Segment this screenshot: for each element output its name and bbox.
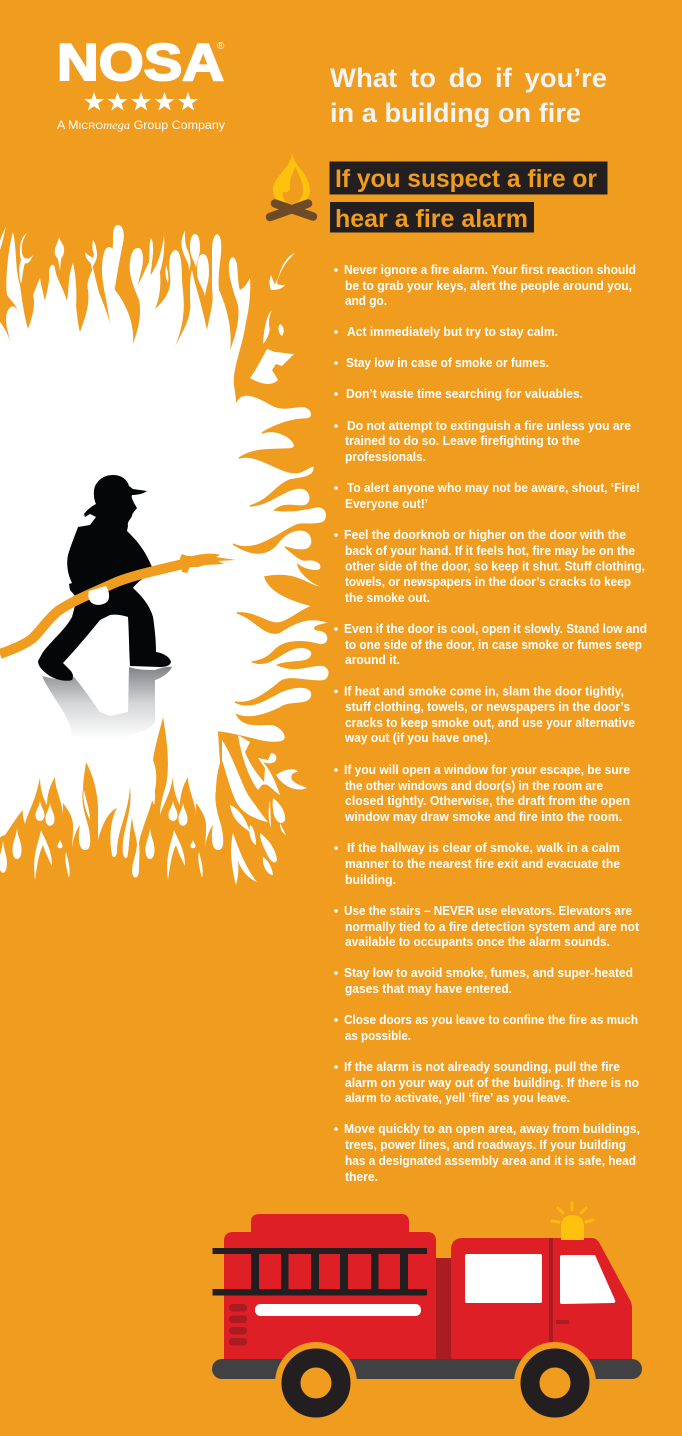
bullet 9 (334, 684, 635, 745)
bullet 5: professionals. (345, 449, 426, 464)
white slivers in lower right flames (222, 735, 307, 885)
bullet 10: window may draw smoke and fire into the room. (344, 809, 622, 824)
bullet 1: and go. (345, 293, 387, 308)
bullet 6: To alert anyone who may not be aware, shout, ‘Fire! (347, 480, 640, 495)
bullet 16: there. (345, 1169, 378, 1184)
bullet 12: available to occupants once the alarm sounds. (345, 934, 610, 949)
bullet 16: trees, power lines, and roadways. If your building (345, 1137, 626, 1152)
title: in a building on fire (330, 98, 581, 128)
truck rear body (224, 1214, 436, 1359)
bullet 1: Never ignore a fire alarm. Your first reaction should (344, 262, 636, 277)
logo: NOSA: NOSA (57, 34, 224, 92)
bullet 10: closed tightly. Otherwise, the draft from the open (345, 793, 630, 808)
truck cab (451, 1238, 632, 1359)
bullet 16: Move quickly to an open area, away from buildings, (344, 1121, 640, 1136)
bullet 15: alarm on your way out of the building. If there is no (345, 1075, 639, 1090)
white drops in top flames (0, 225, 295, 384)
glove (88, 586, 109, 605)
bullet 12: Use the stairs – NEVER use elevators. Elevators are (344, 903, 632, 918)
title (330, 63, 607, 128)
bullet 12 (334, 903, 640, 949)
cab windows (465, 1254, 615, 1304)
top flames (0, 232, 250, 712)
logo: NOSA (57, 34, 225, 132)
bullet 14: as possible. (345, 1028, 411, 1043)
bullet 6 (334, 480, 640, 511)
bullet 13 (334, 965, 633, 996)
bullet 4: Don’t waste time searching for valuables. (346, 386, 583, 401)
bullet 11: If the hallway is clear of smoke, walk in a calm (347, 840, 620, 855)
bullet 2: Act immediately but try to stay calm. (347, 324, 558, 339)
bullet 8: to one side of the door, in case smoke or fumes seep (345, 637, 642, 652)
bullet 15: If the alarm is not already sounding, pull the fire (344, 1059, 620, 1074)
bullet 1: be to grab your keys, alert the people around you, (345, 278, 632, 293)
bullet 16: has a designated assembly area and it is safe, head (345, 1153, 636, 1168)
chassis (212, 1359, 642, 1379)
heading: if you suspect a fire or hear a fire alarm: hear a fire alarm (335, 205, 528, 233)
bullet 3: Stay low in case of smoke or fumes. (346, 355, 549, 370)
bullet 10 (334, 762, 630, 824)
heading: if you suspect a fire or hear a fire alarm (330, 162, 608, 233)
bullet 7: the smoke out. (345, 590, 430, 605)
illustration: fire truck (212, 1203, 642, 1424)
bullet 7: other side of the door, so keep it shut. Stuff clothing, (345, 558, 645, 574)
right flames (200, 395, 330, 743)
bullet 8: Even if the door is cool, open it slowly. Stand low and (344, 621, 647, 636)
bullet 9: way out (if you have one). (344, 730, 491, 745)
reflection (42, 667, 172, 739)
bullet 11: building. (345, 872, 396, 887)
nozzle and spray (180, 554, 236, 573)
bullet 7: towels, or newspapers in the door’s cracks to keep (345, 574, 631, 589)
bullet list (334, 262, 647, 1184)
bullet 9: stuff clothing, towels, or newspapers in the door’s (345, 699, 630, 714)
bullet 15 (334, 1059, 639, 1105)
logo: NOSA: ® (217, 41, 225, 52)
bullet 10: the other windows and door(s) in the room are (345, 778, 603, 793)
bullet 11 (334, 840, 620, 887)
vents (229, 1304, 247, 1346)
heading: if you suspect a fire or hear a fire alarm: If you suspect a fire or (335, 165, 597, 193)
bullet 16 (334, 1121, 640, 1184)
bullet 6: Everyone out!’ (345, 496, 428, 511)
bullet 7: back of your hand. If it feels hot, fire may be on the (345, 543, 635, 558)
bullet 8 (334, 621, 647, 667)
bullet 5 (334, 418, 631, 464)
bullet 7 (334, 527, 645, 605)
bullet 9: If heat and smoke come in, slam the door tightly, (344, 684, 624, 698)
bullet 7: Feel the doorknob or higher on the door with the (344, 527, 626, 542)
bullet 8: around it. (345, 652, 400, 667)
bullet 15: alarm to activate, yell ‘fire’ as you leave. (345, 1090, 570, 1105)
hose (0, 564, 183, 654)
white drops in bottom flames (0, 780, 203, 880)
bullet 13: gases that may have entered. (345, 981, 512, 996)
white stripe (255, 1304, 421, 1316)
bullet 12: normally tied to a fire detection system and are not (345, 919, 640, 934)
bullet 5: trained to do so. Leave firefighting to the (345, 433, 580, 448)
bottom flames (0, 708, 223, 878)
wheels (275, 1342, 596, 1424)
ladder (212, 1248, 427, 1296)
bullet 14: Close doors as you leave to confine the fire as much (344, 1012, 638, 1027)
title: What to do if you’re (330, 63, 607, 93)
bullet 9: cracks to keep smoke out, and use your alternative (345, 715, 635, 730)
icon: campfire (270, 153, 313, 217)
bullet 14 (334, 1012, 638, 1043)
siren light (552, 1203, 593, 1240)
illustration: white fire burst (0, 225, 330, 885)
bullet 13: Stay low to avoid smoke, fumes, and super-heated (344, 965, 633, 980)
bullet 1 (334, 262, 636, 308)
bullet 10: If you will open a window for your escape, be sure (344, 762, 630, 777)
illustration: firefighter silhouette (0, 475, 236, 739)
bullet 11: manner to the nearest fire exit and evacuate the (345, 856, 620, 871)
logo: NOSA: A MICROmega Group Company (57, 118, 225, 132)
bullet 5: Do not attempt to extinguish a fire unless you are (347, 418, 631, 433)
